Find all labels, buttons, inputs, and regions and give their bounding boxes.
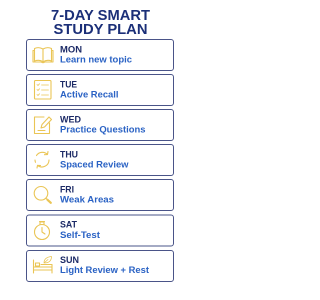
card: Sunday: SUN (60, 255, 79, 265)
card: Monday (26, 40, 174, 70)
card: Thursday (26, 144, 174, 176)
card: Sunday: Light Review + Rest (60, 265, 150, 276)
card: Thursday: Spaced Review (60, 160, 129, 171)
title (51, 7, 150, 38)
card: Saturday: SAT (60, 220, 77, 230)
icon: checklist (34, 80, 51, 99)
icon: refresh arrows (35, 152, 49, 168)
card: Monday: MON (60, 44, 82, 54)
card: Sunday (26, 250, 174, 282)
card: Tuesday (26, 74, 174, 106)
card: Wednesday (26, 110, 174, 140)
icon: magnifier (34, 186, 51, 203)
title: 7-DAY SMART (51, 7, 150, 24)
card: Tuesday: TUE (60, 79, 77, 89)
card: Thursday: THU (60, 149, 78, 159)
icon: open book (33, 48, 53, 63)
card: Saturday (26, 215, 174, 246)
card: Saturday: Self-Test (60, 230, 101, 241)
card: Friday: FRI (60, 184, 74, 194)
icon: stopwatch (34, 222, 50, 240)
card: Wednesday: Practice Questions (60, 125, 146, 136)
icon: bed with leaf (34, 256, 52, 273)
icon: pencil on paper (34, 117, 52, 134)
card: Friday: Weak Areas (60, 195, 114, 206)
card: Wednesday: WED (60, 114, 81, 124)
card: Friday (26, 180, 174, 210)
card: Monday: Learn new topic (60, 55, 133, 66)
title: STUDY PLAN (54, 21, 148, 38)
card: Tuesday: Active Recall (60, 90, 118, 101)
